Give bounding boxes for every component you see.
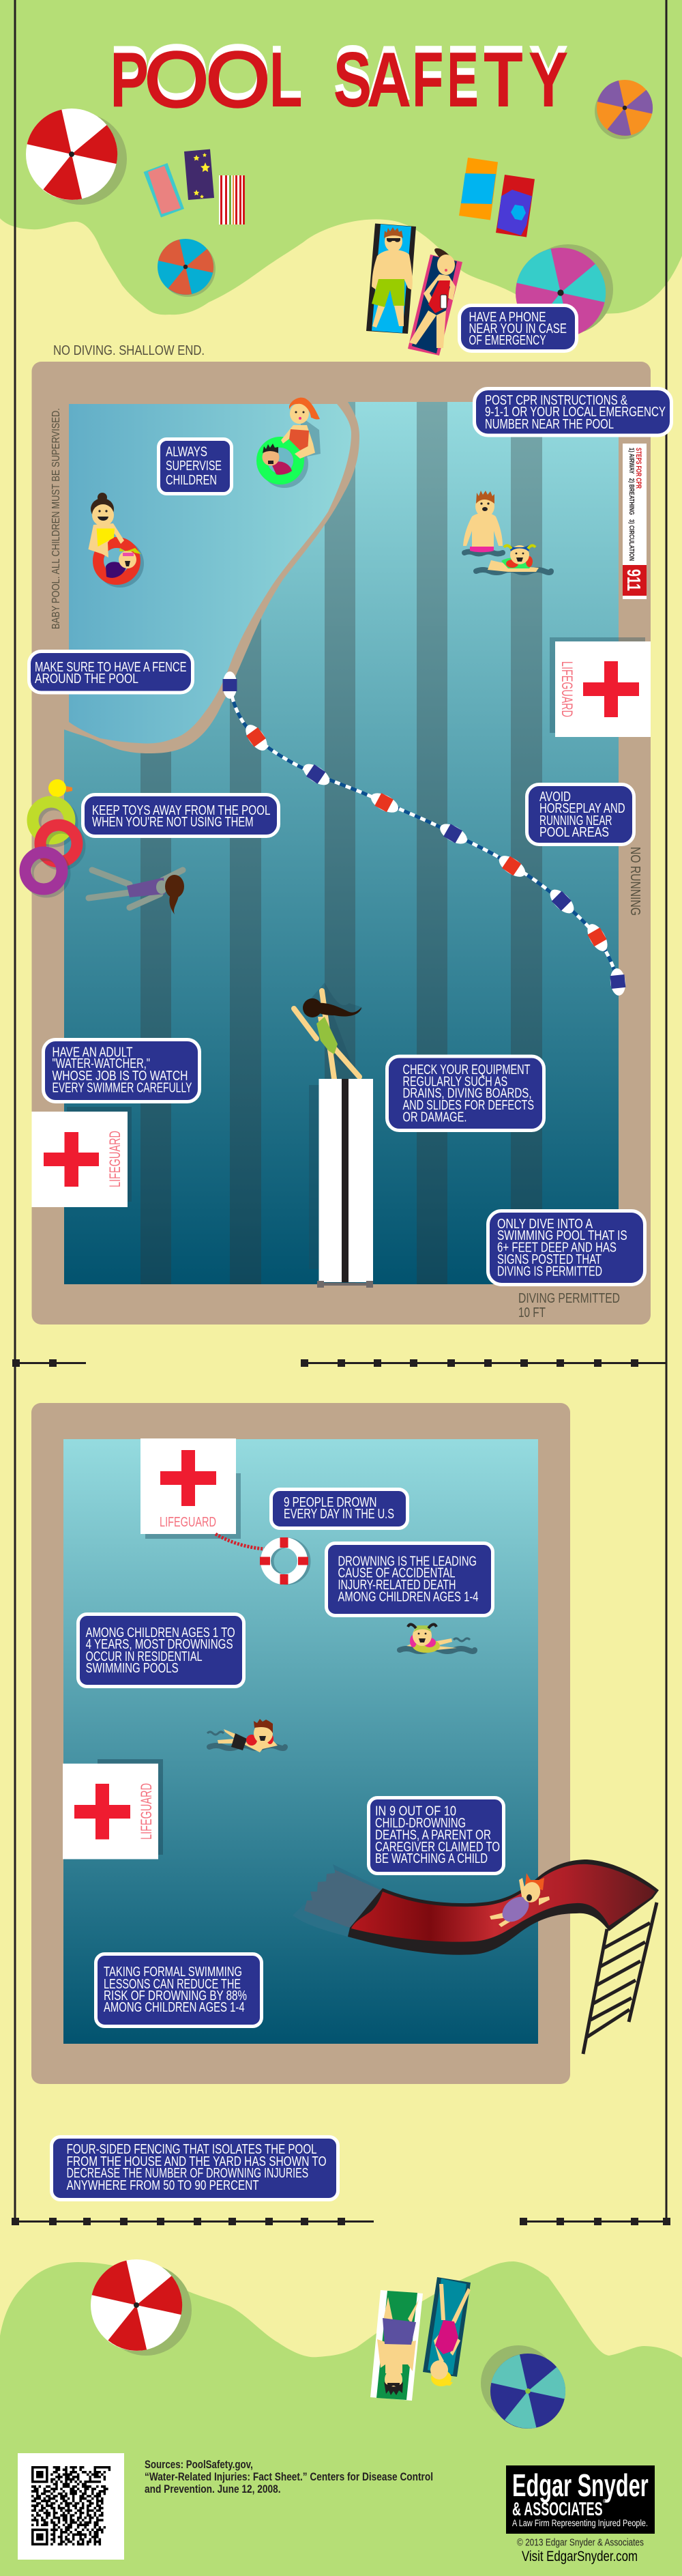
- callout: always supervise: SUPERVISE: [166, 459, 222, 474]
- QR code: [18, 2453, 124, 2560]
- title: O: [145, 36, 209, 123]
- sign: lifeguard right: [550, 637, 651, 737]
- callout: four-sided fencing: FROM THE HOUSE AND THE YARD HAS SHOWN TO: [67, 2154, 327, 2169]
- title: O: [206, 29, 270, 116]
- callout: horseplay: AVOID: [539, 790, 571, 805]
- callout: water watcher: [44, 1040, 199, 1101]
- callout: 9 people drown: 9 PEOPLE DROWN: [284, 1495, 376, 1510]
- boy swimmer: [207, 1719, 285, 1752]
- text: sources: [145, 2458, 433, 2495]
- title: Y: [529, 36, 568, 124]
- slide red surface: [351, 1864, 655, 1942]
- callout: swimming lessons: LESSONS CAN REDUCE THE: [104, 1977, 241, 1992]
- sign: steps for CPR: 911: [623, 569, 644, 591]
- title: E: [447, 38, 479, 124]
- callout: 9 out of 10: IN 9 OUT OF 10: [375, 1804, 456, 1819]
- title: L: [269, 36, 302, 123]
- icon: bottom red and white umbrella: [91, 2259, 192, 2356]
- callout: CPR instructions: [475, 389, 671, 435]
- text: copyright: © 2013 Edgar Snyder & Associates: [517, 2537, 644, 2549]
- buoy rope: [222, 671, 627, 996]
- sign: steps for CPR: 1) AIRWAY 2) BREATHING 3) CIRCULATION: [627, 448, 636, 561]
- title: [110, 29, 568, 124]
- callout: leading cause: [326, 1544, 492, 1616]
- sign: lifeguard top: [140, 1438, 241, 1539]
- water: [63, 1439, 538, 2044]
- diving board: [309, 1079, 373, 1288]
- title: O: [206, 36, 270, 123]
- callout: check equipment: CHECK YOUR EQUIPMENT: [402, 1062, 531, 1077]
- title: S: [333, 37, 372, 124]
- callout: residential pools: 4 YEARS, MOST DROWNINGS: [86, 1637, 233, 1652]
- callout: water watcher: EVERY SWIMMER CAREFULLY: [52, 1081, 192, 1096]
- callout: phone: NEAR YOU IN CASE: [469, 321, 567, 336]
- title: F: [412, 29, 443, 117]
- icon: red and white beach umbrella: [26, 108, 127, 205]
- title: P: [110, 37, 149, 124]
- underwater swimmer: [89, 870, 184, 914]
- callout: horseplay: HORSEPLAY AND: [539, 801, 625, 816]
- sign: steps for CPR: [623, 444, 647, 599]
- callout: phone: OF EMERGENCY: [469, 333, 546, 348]
- callout: residential pools: [78, 1615, 244, 1687]
- ladder: [583, 1902, 657, 2054]
- callout: four-sided fencing: FOUR-SIDED FENCING THAT ISOLATES THE POOL: [67, 2142, 317, 2157]
- text: baby pool supervised: BABY POOL. ALL CHILDREN MUST BE SUPERVISED.: [50, 408, 62, 629]
- callout: leading cause: AMONG CHILDREN AGES 1-4: [338, 1590, 479, 1605]
- towels left: [143, 149, 245, 225]
- baby pool curb: [64, 362, 359, 753]
- callout: fence: [29, 651, 192, 693]
- slide black edge: [348, 1859, 659, 1955]
- icon: orange and purple umbrella: [595, 80, 653, 139]
- panel: main pool: [31, 362, 651, 1325]
- callout: four-sided fencing: DECREASE THE NUMBER OF DROWNING INJURIES: [67, 2166, 308, 2181]
- logo: Edgar Snyder and Associates: ®: [603, 2498, 607, 2504]
- callout: check equipment: [387, 1056, 544, 1130]
- callout: only dive: DIVING IS PERMITTED: [497, 1264, 602, 1279]
- logo: Edgar Snyder and Associates: A Law Firm Representing Injured People.: [512, 2518, 648, 2528]
- callout: leading cause: DROWNING IS THE LEADING: [338, 1554, 477, 1569]
- title: E: [447, 31, 479, 117]
- towels right: [459, 158, 535, 237]
- callout: phone: HAVE A PHONE: [469, 310, 546, 325]
- callout: always supervise: [158, 439, 232, 494]
- text: sources: and Prevention. June 12, 2008.: [145, 2483, 281, 2495]
- girl on slide: [490, 1873, 550, 1927]
- title: Y: [529, 29, 568, 117]
- callout: 9 out of 10: [368, 1797, 503, 1874]
- title: O: [145, 29, 209, 116]
- callout: CPR instructions: POST CPR INSTRUCTIONS &: [485, 393, 627, 408]
- callout: 9 out of 10: BE WATCHING A CHILD: [375, 1851, 488, 1866]
- callout: 9 out of 10: CHILD-DROWNING: [375, 1816, 466, 1831]
- sign: lifeguard right: LIFEGUARD: [559, 661, 576, 717]
- title: L: [269, 29, 302, 116]
- callout: water watcher: HAVE AN ADULT: [52, 1045, 132, 1060]
- sign: lifeguard top: LIFEGUARD: [160, 1515, 216, 1530]
- title: S: [333, 30, 372, 117]
- callout: leading cause: INJURY-RELATED DEATH: [338, 1578, 456, 1593]
- title: T: [484, 30, 523, 117]
- title: T: [484, 37, 523, 124]
- callout: four-sided fencing: [52, 2137, 338, 2200]
- sign: lifeguard left second pool: LIFEGUARD: [138, 1783, 155, 1840]
- callout: only dive: 6+ FEET DEEP AND HAS: [497, 1241, 617, 1256]
- water: [64, 402, 619, 1284]
- sign: lifeguard left: [31, 1107, 132, 1207]
- child in water: [476, 545, 551, 573]
- sunbather on teal towel: [423, 2277, 471, 2386]
- sign: no diving: NO DIVING. SHALLOW END.: [53, 343, 205, 358]
- title: P: [110, 30, 149, 117]
- callout: fence: AROUND THE POOL: [35, 671, 138, 686]
- title: A: [367, 36, 411, 123]
- callout: fence: MAKE SURE TO HAVE A FENCE: [35, 660, 187, 675]
- callout: swimming lessons: TAKING FORMAL SWIMMING: [104, 1965, 242, 1980]
- bottom grass: [0, 2261, 682, 2576]
- callout: only dive: ONLY DIVE INTO A: [497, 1217, 593, 1232]
- sign: steps for CPR: STEPS FOR CPR: [634, 448, 642, 489]
- callout: 9 out of 10: CAREGIVER CLAIMED TO: [375, 1840, 500, 1855]
- callout: residential pools: OCCUR IN RESIDENTIAL: [86, 1649, 203, 1664]
- callout: 9 out of 10: DEATHS, A PARENT OR: [375, 1827, 491, 1842]
- man in water: [463, 491, 503, 554]
- submerged slide: [293, 1904, 350, 1937]
- diver: [294, 983, 362, 1084]
- callout: check equipment: OR DAMAGE.: [402, 1110, 466, 1125]
- title: A: [367, 29, 411, 116]
- callout: swimming lessons: AMONG CHILDREN AGES 1-4: [104, 2000, 245, 2015]
- sign: lifeguard left second pool: [63, 1759, 163, 1859]
- callout: horseplay: [527, 785, 634, 845]
- callout: residential pools: SWIMMING POOLS: [86, 1661, 179, 1676]
- water slide with ladder: [293, 1859, 659, 2054]
- callout: phone: [460, 306, 577, 351]
- sunbathing man on towel: [366, 224, 416, 334]
- callout: check equipment: AND SLIDES FOR DEFECTS: [402, 1098, 534, 1113]
- pool deck: [31, 362, 651, 1325]
- sunbather on green towel: [370, 2290, 423, 2401]
- callout: 9 people drown: [271, 1489, 408, 1529]
- callout: horseplay: RUNNING NEAR: [539, 813, 612, 828]
- callout: water watcher: WHOSE JOB IS TO WATCH: [52, 1069, 188, 1084]
- callout: 9 people drown: EVERY DAY IN THE U.S: [284, 1507, 394, 1522]
- callout: water watcher: "WATER-WATCHER,": [52, 1056, 150, 1071]
- icon: blue and orange umbrella: [158, 239, 216, 297]
- baby pool water: [69, 404, 351, 743]
- toys: duck and rings: [25, 779, 80, 892]
- icon: magenta and turquoise umbrella: [516, 244, 613, 338]
- panel: second pool: [31, 1403, 570, 2084]
- callout: always supervise: CHILDREN: [166, 473, 217, 488]
- text: diving permitted: DIVING PERMITTED: [518, 1291, 620, 1306]
- text: no running: NO RUNNING: [627, 847, 642, 916]
- callout: only dive: [488, 1211, 645, 1284]
- callout: swimming lessons: [95, 1954, 262, 2027]
- callout: only dive: SWIMMING POOL THAT IS: [497, 1228, 627, 1243]
- mother with child in red ring: [89, 493, 144, 588]
- mother with child in green ring: [261, 398, 321, 488]
- child swimmer with pigtails: [400, 1624, 475, 1653]
- text: website: Visit EdgarSnyder.com: [522, 2549, 638, 2564]
- callout: toys: KEEP TOYS AWAY FROM THE POOL: [92, 803, 270, 818]
- text: diving permitted: [518, 1291, 620, 1320]
- callout: leading cause: CAUSE OF ACCIDENTAL: [338, 1566, 456, 1581]
- text: diving permitted: 10 FT: [518, 1305, 546, 1320]
- icon: life ring and rope: [216, 1534, 308, 1584]
- callout: four-sided fencing: ANYWHERE FROM 50 TO 90 PERCENT: [67, 2178, 259, 2193]
- logo: Edgar Snyder and Associates: [506, 2465, 655, 2534]
- callout: horseplay: POOL AREAS: [539, 825, 609, 840]
- text: sources: “Water-Related Injuries: Fact Sheet.” Centers for Disease Control: [145, 2470, 433, 2483]
- sunbathing woman on towel with phone: [408, 248, 462, 356]
- lane stripes: [140, 402, 542, 1284]
- pool deck: [31, 1403, 570, 2084]
- callout: toys: [83, 794, 278, 837]
- top grass: [0, 0, 682, 315]
- title: F: [412, 35, 443, 124]
- callout: residential pools: AMONG CHILDREN AGES 1 TO: [86, 1625, 235, 1640]
- callout: always supervise: ALWAYS: [166, 445, 207, 460]
- callout: check equipment: DRAINS, DIVING BOARDS,: [402, 1086, 532, 1101]
- sign: lifeguard left: LIFEGUARD: [106, 1131, 123, 1187]
- text: sources: Sources: PoolSafety.gov,: [145, 2458, 253, 2471]
- callout: CPR instructions: NUMBER NEAR THE POOL: [485, 417, 614, 432]
- icon: bottom navy and teal umbrella: [481, 2345, 565, 2429]
- callout: toys: WHEN YOU'RE NOT USING THEM: [92, 815, 254, 830]
- callout: check equipment: REGULARLY SUCH AS: [402, 1074, 507, 1089]
- logo: Edgar Snyder and Associates: & ASSOCIATES: [512, 2498, 603, 2519]
- callout: only dive: SIGNS POSTED THAT: [497, 1252, 602, 1267]
- callout: swimming lessons: RISK OF DROWNING BY 88%: [104, 1988, 247, 2003]
